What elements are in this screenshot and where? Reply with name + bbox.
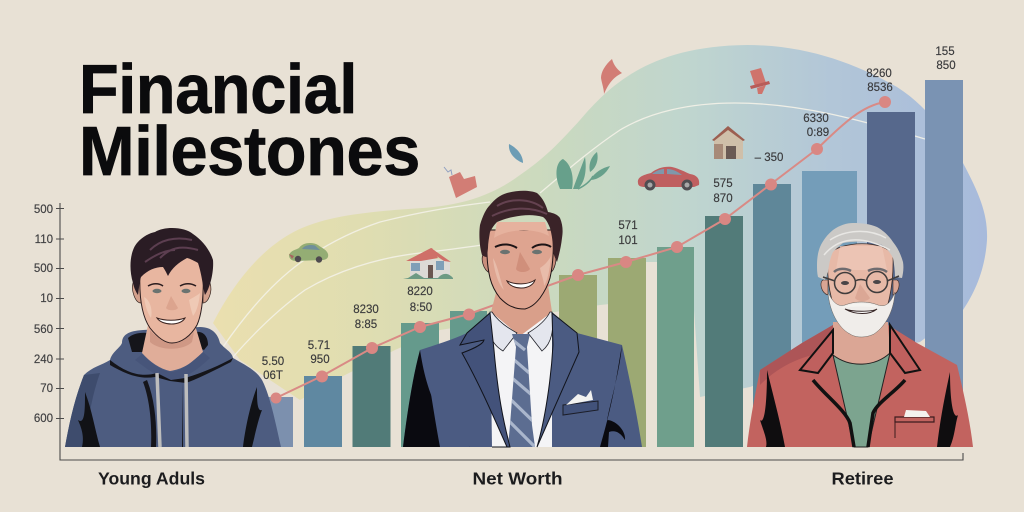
icon: house with red roof <box>403 248 453 279</box>
icon: red pin hat <box>750 68 770 94</box>
bar value labels: 8220 <box>407 286 433 298</box>
bar value labels: 850 <box>936 60 956 72</box>
x axis label: retiree: Retiree <box>832 468 894 488</box>
background wave <box>213 45 987 400</box>
y axis labels: 110 <box>35 234 53 246</box>
background gap strip <box>646 262 657 447</box>
icon: green plant <box>556 152 610 189</box>
y axis labels: 70 <box>40 383 53 395</box>
icon: green car <box>289 243 328 263</box>
title: Milestones <box>79 112 420 190</box>
bar value labels: 8260 <box>866 68 892 80</box>
title <box>79 50 420 190</box>
bar value labels: 575 <box>713 178 733 190</box>
y axis and baseline <box>56 203 963 460</box>
person: mid-career professional <box>403 191 642 447</box>
bar value labels: 571 <box>618 220 638 232</box>
y axis labels: 10 <box>40 293 53 305</box>
x axis label: net worth: Net Worth <box>472 468 562 488</box>
y axis labels <box>34 204 53 425</box>
bar value labels: 06T <box>263 370 283 382</box>
icon: red car <box>638 167 699 190</box>
bar value labels: 950 <box>310 354 330 366</box>
title: Financial <box>79 50 357 128</box>
y axis labels: 500 <box>34 263 53 275</box>
y axis labels: 600 <box>34 413 53 425</box>
bar value labels: – 350 <box>755 152 783 164</box>
bar value labels: 5.71 <box>308 340 330 352</box>
bar value labels: 8536 <box>867 82 893 94</box>
bar value labels: 8:85 <box>355 319 377 331</box>
icon: red flag shape <box>601 59 622 94</box>
bar value labels: 8230 <box>353 304 379 316</box>
net worth trend line <box>270 96 891 404</box>
bar value labels: 6330 <box>803 113 829 125</box>
bar value labels: 8:50 <box>410 302 432 314</box>
milestone path curves <box>223 103 925 357</box>
bar value labels: 101 <box>618 235 638 247</box>
bar chart <box>260 80 963 447</box>
bar value labels <box>262 46 956 382</box>
bar value labels: 870 <box>713 193 733 205</box>
y axis labels: 240 <box>34 354 53 366</box>
y axis labels: 560 <box>34 324 53 336</box>
bar value labels: 0:89 <box>807 127 829 139</box>
icon: tan house <box>712 126 745 159</box>
person: young adult <box>65 228 281 447</box>
icon: red blocks <box>444 167 477 198</box>
x axis label: young adults: Young Aduls <box>98 468 205 488</box>
person: retiree <box>747 223 973 447</box>
y axis labels: 500 <box>34 204 53 216</box>
bar value labels: 5.50 <box>262 356 284 368</box>
bar value labels: 155 <box>935 46 955 58</box>
icon: blue leaf <box>509 144 523 163</box>
